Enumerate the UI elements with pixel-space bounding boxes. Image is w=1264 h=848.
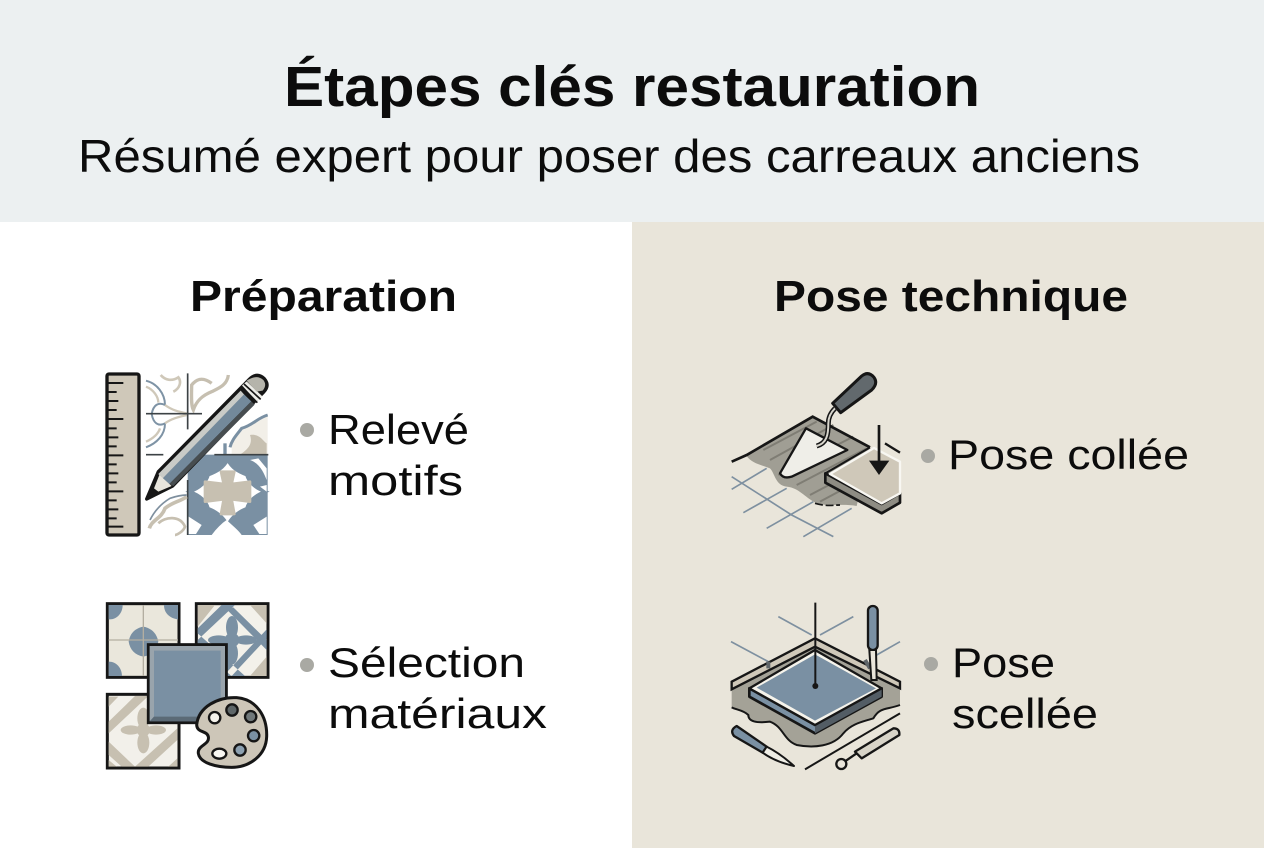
tile motif bottom left — [149, 495, 187, 535]
label: pose scellée: scellée — [952, 690, 1098, 737]
label: pose scellée: Pose — [952, 639, 1055, 686]
label: relevé motifs: motifs — [328, 457, 463, 504]
icon: tile samples and palette — [107, 604, 268, 768]
label: relevé motifs: Relevé — [328, 406, 469, 453]
string lines — [731, 617, 900, 662]
arrow: down — [869, 425, 889, 475]
chisel upright — [868, 606, 878, 680]
tile sketch top — [146, 373, 228, 455]
panel: préparation — [0, 222, 632, 848]
panel: pose technique — [632, 222, 1264, 848]
label: pose collée: Pose collée — [948, 431, 1189, 478]
icon: ruler, pencil and tile motifs — [107, 373, 268, 535]
tile sample bottom left — [107, 694, 179, 768]
adhesive layer — [732, 417, 870, 506]
palette — [197, 698, 267, 767]
layout grid — [732, 468, 852, 537]
pencil — [147, 375, 267, 499]
icon: trowel and glued tile — [732, 374, 900, 537]
bullet: pose collée — [921, 449, 935, 463]
heading: pose technique: Pose technique — [774, 272, 1128, 321]
heading: préparation: Préparation — [190, 272, 457, 321]
diagonal rule — [805, 713, 900, 769]
ruler — [107, 374, 139, 535]
bullet: pose scellée — [924, 657, 938, 671]
tile being placed — [825, 443, 900, 513]
mortar bed — [732, 638, 900, 746]
bullet: sélection matériaux — [300, 658, 314, 672]
tile sample top right — [196, 604, 268, 677]
bullet: relevé motifs — [300, 423, 314, 437]
central blue tile — [148, 645, 226, 723]
trowel — [780, 374, 876, 477]
panel: header band — [0, 0, 1264, 222]
tile motif bottom right — [188, 414, 268, 535]
spatula — [732, 726, 794, 766]
plumb line — [812, 603, 818, 689]
label: sélection matériaux: matériaux — [328, 690, 547, 737]
tile sample top left — [107, 604, 179, 677]
label: sélection matériaux: Sélection — [328, 639, 525, 686]
brush tool — [836, 728, 899, 769]
icon: sealed tile on mortar bed — [731, 603, 900, 769]
blue tile — [749, 650, 882, 733]
title: Étapes clés restauration — [284, 55, 980, 119]
subtitle: Résumé expert pour poser des carreaux anciens — [78, 130, 1140, 182]
